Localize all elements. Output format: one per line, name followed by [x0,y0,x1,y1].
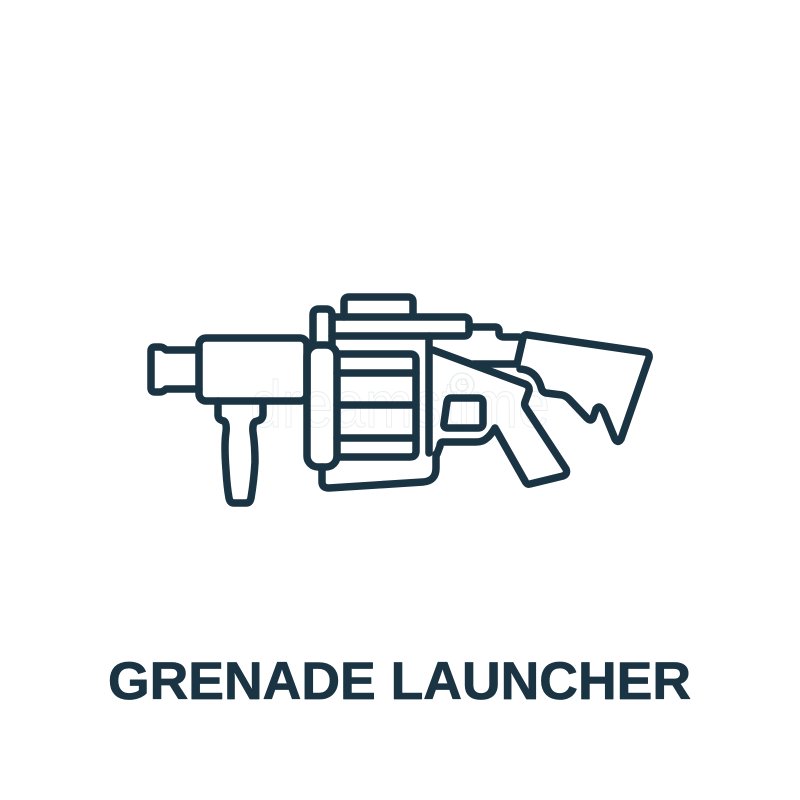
cylinder bands [337,373,416,438]
icon: grenade launcher [151,297,649,503]
drum collar [313,309,332,345]
stock connector [469,327,519,337]
top sight [344,297,413,317]
title: GRENADE LAUNCHER [108,652,691,711]
foregrip [218,401,263,503]
cylinder [337,354,416,457]
pistol grip and frame [433,350,567,484]
top rail [332,317,469,336]
receiver post [425,336,433,453]
drum front ring [307,345,337,467]
watermark: dreamstime [250,367,550,441]
lower housing [322,454,436,488]
muzzle [151,347,199,392]
barrel [199,338,307,401]
buttstock [517,335,649,442]
trigger guard [444,398,483,428]
receiver strut [473,360,517,368]
